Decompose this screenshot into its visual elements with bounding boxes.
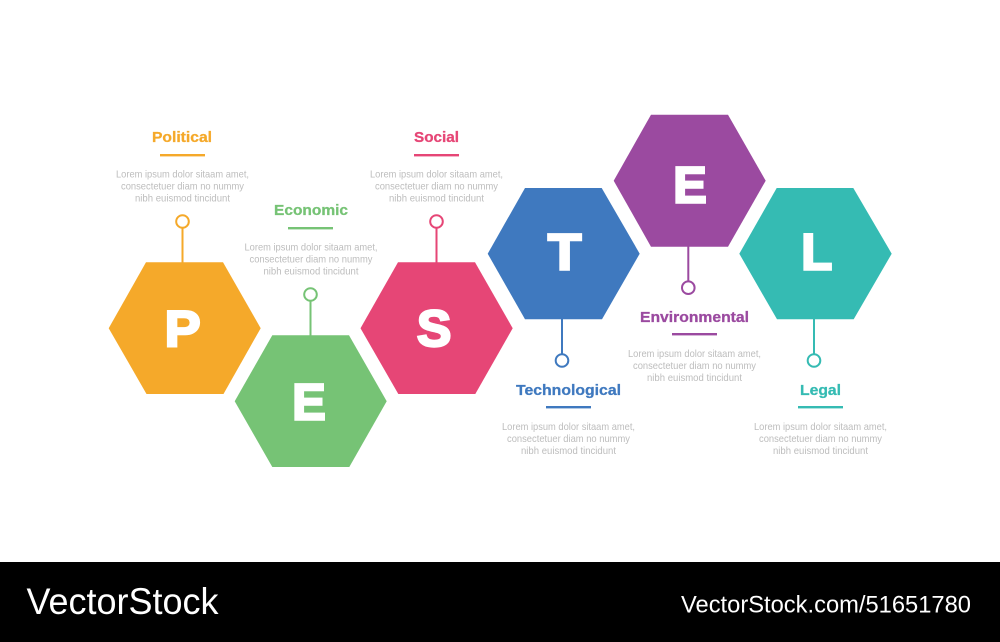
heading: Technological: Technological — [516, 382, 621, 399]
text block: Social description: Lorem ipsum dolor sitaam amet, — [370, 168, 503, 180]
heading: Environmental: Environmental — [640, 309, 749, 326]
text block: Economic description: nibh euismod tincidunt — [264, 266, 359, 278]
connector: Technological pin — [556, 319, 568, 367]
letter: E: E — [292, 373, 326, 430]
connector: Social pin — [430, 215, 443, 263]
heading: Social: Social — [414, 129, 459, 146]
text block: Political description: consectetuer diam no nummy — [121, 180, 245, 192]
text block: Social description: consectetuer diam no nummy — [375, 180, 499, 192]
column: Economic — [235, 202, 387, 467]
text block: Technological description: Lorem ipsum dolor sitaam amet, — [502, 421, 635, 433]
hexagon: E — [235, 335, 387, 467]
text block: Technological description: nibh euismod tincidunt — [521, 445, 616, 457]
heading: Economic: Economic — [274, 202, 348, 219]
column: Legal — [739, 188, 892, 457]
text block: Legal description: consectetuer diam no nummy — [759, 433, 883, 445]
text block: Environmental description: consectetuer diam no nummy — [633, 360, 757, 372]
heading: Political: Political — [152, 129, 212, 146]
letter: P: P — [165, 300, 201, 357]
text block: Political description: nibh euismod tincidunt — [135, 192, 230, 204]
text block: Legal description: nibh euismod tincidunt — [773, 445, 868, 457]
letter: L: L — [801, 224, 832, 281]
hexagon: T — [488, 188, 640, 319]
column: Political — [109, 129, 261, 394]
hexagon: S — [360, 262, 513, 394]
footer bar — [0, 562, 1000, 642]
connector: Legal pin — [808, 319, 820, 367]
connector: Economic pin — [304, 288, 317, 336]
letter: E: E — [673, 156, 707, 213]
text block: Environmental description: Lorem ipsum dolor sitaam amet, — [628, 348, 761, 360]
connector: Environmental pin — [682, 246, 695, 294]
column: Environmental — [614, 115, 766, 384]
hexagon: P — [109, 262, 261, 394]
text block: Social description: nibh euismod tincidunt — [389, 192, 484, 204]
brand name: VectorStock — [26, 580, 219, 622]
column: Technological — [488, 188, 640, 457]
hexagon: L — [739, 188, 892, 319]
text block: Economic description: Lorem ipsum dolor sitaam amet, — [244, 242, 378, 254]
text block: Legal description: Lorem ipsum dolor sitaam amet, — [754, 421, 887, 433]
text block: Economic description: consectetuer diam no nummy — [250, 254, 373, 266]
column: Social — [360, 129, 513, 394]
connector: Political pin — [176, 215, 189, 263]
letter: T: T — [548, 224, 581, 281]
hexagon: E — [614, 115, 766, 247]
heading: Legal: Legal — [800, 382, 841, 399]
text block: Political description: Lorem ipsum dolor sitaam amet, — [116, 168, 249, 180]
text block: Environmental description: nibh euismod tincidunt — [647, 372, 742, 384]
image id: VectorStock.com/51651780 — [681, 592, 971, 619]
letter: S: S — [417, 300, 451, 357]
text block: Technological description: consectetuer diam no nummy — [507, 433, 631, 445]
